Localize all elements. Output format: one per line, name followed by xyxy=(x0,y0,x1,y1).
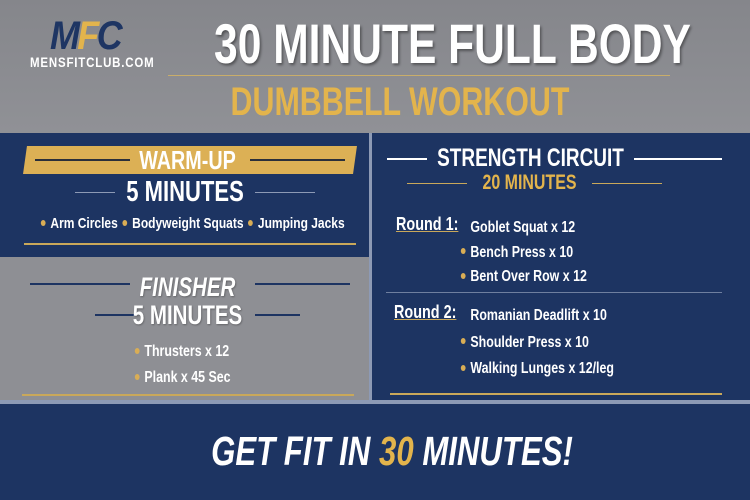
round 2: Round 2: xyxy=(394,302,456,322)
strength title: STRENGTH CIRCUIT xyxy=(437,144,624,172)
footer slogan: GET FIT IN 30 MINUTES! xyxy=(211,428,573,474)
panel: strength circuit: Bench Press x 10 xyxy=(470,244,573,260)
logo xyxy=(30,14,155,70)
panel: strength circuit: Shoulder Press x 10 xyxy=(470,334,589,350)
logo: MENSFITCLUB.COM xyxy=(30,54,155,70)
title: 30 MINUTE FULL BODY xyxy=(214,12,691,75)
warm-up duration: 5 MINUTES xyxy=(126,176,244,208)
panel: strength circuit: Goblet Squat x 12 xyxy=(470,219,575,236)
finisher exercises: Plank x 45 Sec xyxy=(144,369,231,386)
panel: warm-up xyxy=(0,133,369,257)
panel: warm-up: WARM-UP xyxy=(139,145,236,175)
panel: strength circuit: Romanian Deadlift x 10 xyxy=(470,307,607,324)
logo: MFC xyxy=(50,14,120,58)
header band xyxy=(0,0,750,133)
finisher exercises xyxy=(134,343,231,386)
panel: strength circuit: Bent Over Row x 12 xyxy=(470,268,587,285)
subtitle: DUMBBELL WORKOUT xyxy=(231,80,569,124)
finisher title: FINISHER xyxy=(140,272,235,302)
warm-up banner xyxy=(23,146,357,174)
warm-up exercises: Arm Circles Bodyweight Squats Jumping Jacks xyxy=(50,215,345,232)
strength duration: 20 MINUTES xyxy=(482,171,577,194)
finisher exercises: Thrusters x 12 xyxy=(144,343,229,360)
round 1: Round 1: xyxy=(396,214,458,234)
panel: strength circuit xyxy=(369,133,750,400)
finisher duration: 5 MINUTES xyxy=(133,300,242,330)
panel: finisher xyxy=(0,257,369,400)
panel: strength circuit: Walking Lunges x 12/leg xyxy=(470,360,614,377)
footer band xyxy=(0,400,750,500)
